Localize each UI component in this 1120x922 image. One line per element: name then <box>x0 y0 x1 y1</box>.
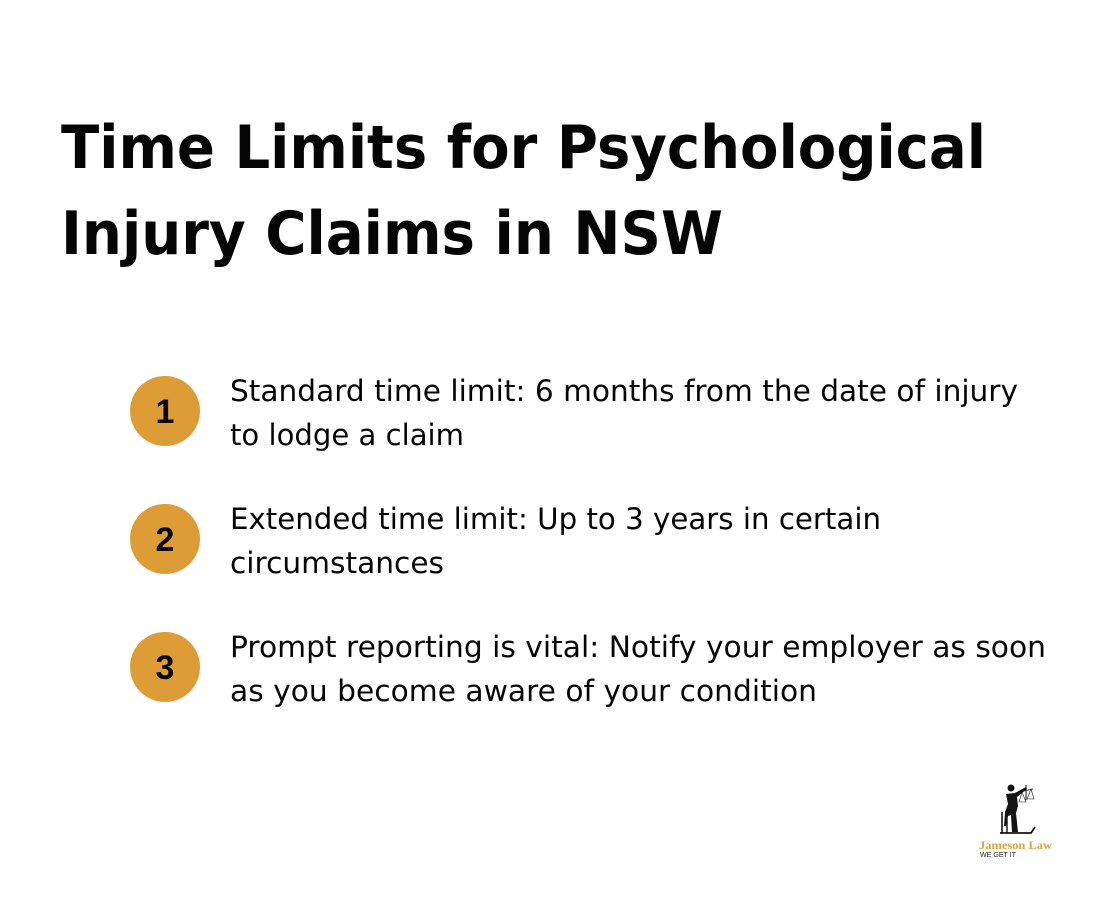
item 1: standard time limit <box>130 374 1018 452</box>
logo: Jameson Law <box>979 784 1053 859</box>
text: prompt reporting: Prompt reporting is vital: Notify your employer as soon <box>230 630 1046 664</box>
number badge 1 <box>130 376 200 446</box>
title: Injury Claims in NSW <box>61 199 723 269</box>
text: extended time limit: Extended time limit: Up to 3 years in certain <box>230 502 881 536</box>
number badge 1: 1 <box>156 393 174 431</box>
number badge 2: 2 <box>156 521 174 559</box>
number badge 3 <box>130 632 200 702</box>
number badge 3: 3 <box>156 649 174 687</box>
text: standard time limit: to lodge a claim <box>230 418 464 452</box>
text: extended time limit <box>230 502 881 580</box>
text: prompt reporting: as you become aware of your condition <box>230 674 817 708</box>
text: standard time limit <box>230 374 1018 452</box>
item 2: extended time limit <box>130 502 881 580</box>
title: Time Limits for Psychological <box>61 113 986 183</box>
logo tagline: WE GET IT <box>980 852 1017 859</box>
text: extended time limit: circumstances <box>230 546 444 580</box>
text: standard time limit: Standard time limit: 6 months from the date of injury <box>230 374 1018 408</box>
icon: lady justice figure <box>1000 784 1035 833</box>
number badge 2 <box>130 504 200 574</box>
logo name: Jameson Law <box>979 840 1053 852</box>
item 3: prompt reporting <box>130 630 1046 708</box>
text: prompt reporting <box>230 630 1046 708</box>
title <box>61 113 986 269</box>
